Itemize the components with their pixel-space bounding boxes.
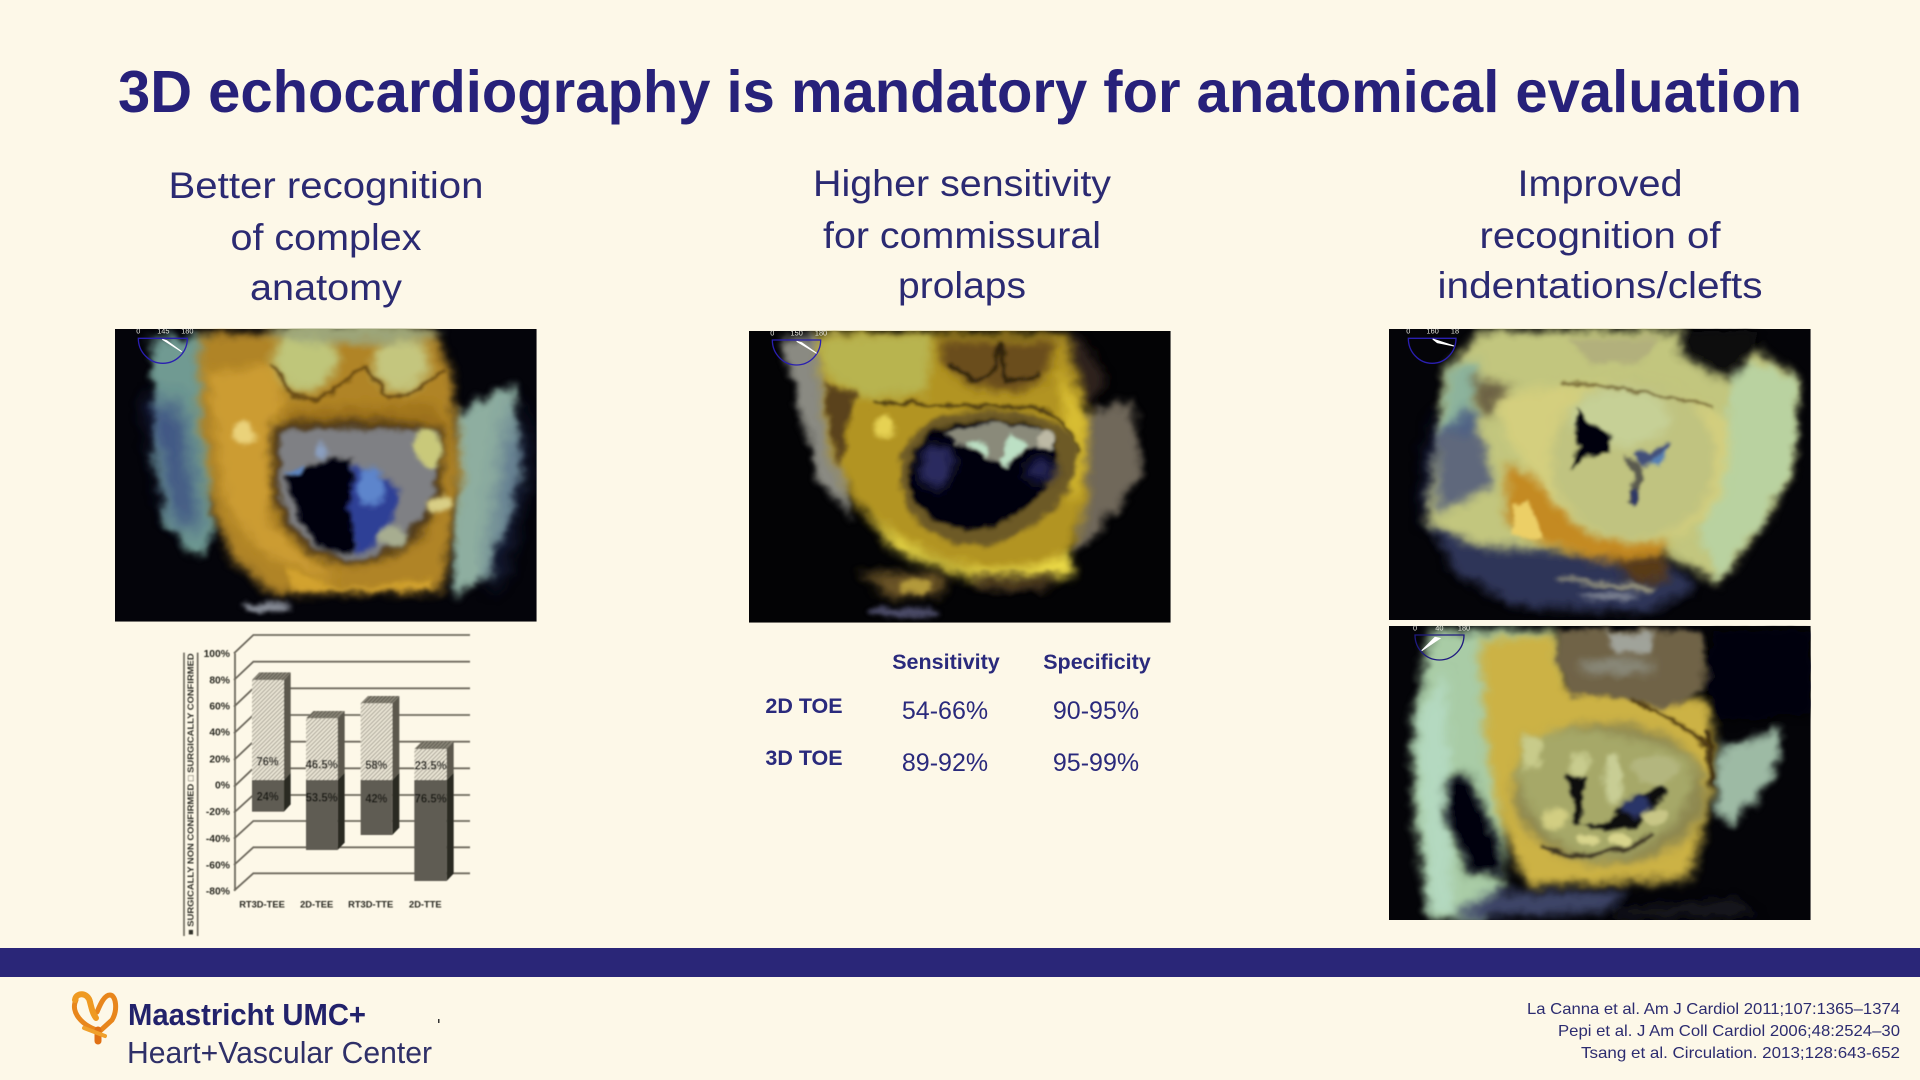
x axis labels	[239, 900, 442, 910]
angle indicator: 0	[136, 327, 140, 336]
heading: indentations and clefts: indentations/clefts	[1438, 265, 1762, 306]
row: 2D TOE: 54-66%	[902, 697, 988, 725]
y axis labels: -80%	[206, 887, 230, 898]
heading: commissural prolaps: for commissural	[823, 215, 1101, 256]
legend	[184, 653, 198, 936]
x axis labels: 2D-TEE	[300, 900, 333, 910]
table header	[892, 650, 1151, 674]
angle indicator: 150	[791, 329, 803, 338]
angle indicator: 18	[1451, 327, 1459, 336]
heading: commissural prolaps	[813, 163, 1112, 306]
heading: indentations and clefts: recognition of	[1480, 215, 1721, 256]
title: 3D echocardiography is mandatory for anatomical evaluation	[118, 59, 1802, 125]
x axis labels: RT3D-TEE	[239, 900, 285, 910]
references: Tsang et al. Circulation. 2013;128:643-652	[1581, 1045, 1900, 1062]
angle indicator: 0	[1406, 327, 1410, 336]
y axis labels: -60%	[206, 860, 230, 871]
x axis labels: RT3D-TTE	[348, 900, 393, 910]
department name: Heart+Vascular Center	[127, 1035, 432, 1070]
y axis labels: 80%	[209, 675, 230, 686]
heading: commissural prolaps: prolaps	[898, 265, 1026, 306]
bar value labels: 23.5%	[415, 759, 447, 772]
y axis labels: 100%	[204, 649, 230, 660]
table header: Sensitivity	[892, 650, 1000, 674]
bar value labels: 46.5%	[306, 758, 338, 771]
echo image: commissural prolaps	[749, 329, 1171, 623]
heading: complex anatomy	[168, 165, 484, 308]
grid lines	[234, 635, 470, 891]
footer band	[0, 948, 1920, 977]
angle indicator: 0	[1413, 623, 1417, 632]
echo image: clefts bottom	[1389, 623, 1811, 920]
logo: Maastricht UMC+	[74, 994, 432, 1070]
heading: complex anatomy: of complex	[230, 217, 422, 258]
bar: RT3D-TTE	[361, 696, 399, 835]
angle indicator: 180	[181, 327, 193, 336]
bar value labels: 42%	[365, 793, 388, 806]
legend: ■ SURGICALLY NON CONFIRMED □ SURGICALLY CONFIRMED	[185, 653, 195, 935]
table header: Specificity	[1043, 650, 1151, 674]
angle indicator	[770, 329, 827, 365]
row: 2D TOE	[765, 694, 1139, 725]
row: 3D TOE: 95-99%	[1053, 749, 1139, 777]
bar value labels: 24%	[257, 790, 279, 803]
references	[1527, 1001, 1900, 1062]
heading: complex anatomy: anatomy	[250, 267, 403, 308]
angle indicator	[1406, 327, 1459, 363]
heading: indentations and clefts	[1438, 163, 1762, 306]
bar: RT3D-TEE	[252, 672, 291, 812]
echo image: clefts top	[1389, 327, 1811, 620]
y axis labels: 40%	[209, 728, 230, 739]
row: 2D TOE: 90-95%	[1053, 697, 1139, 725]
x axis labels: 2D-TTE	[409, 900, 442, 910]
y axis labels: 60%	[209, 701, 230, 712]
heading: complex anatomy: Better recognition	[168, 165, 484, 206]
references: La Canna et al. Am J Cardiol 2011;107:1365–1374	[1527, 1001, 1900, 1018]
row: 3D TOE: 3D TOE	[765, 746, 843, 770]
row: 3D TOE	[765, 746, 1139, 777]
bar value labels: 58%	[365, 759, 388, 772]
icon: orange heart ribbon	[74, 994, 116, 1041]
angle indicator: 160	[1427, 327, 1439, 336]
angle indicator: 145	[157, 327, 169, 336]
stray mark near logo	[438, 1019, 440, 1023]
heading: commissural prolaps: Higher sensitivity	[813, 163, 1112, 204]
bar: 2D-TTE	[414, 742, 454, 881]
brand name: Maastricht UMC+	[128, 997, 366, 1032]
angle indicator	[1413, 623, 1470, 660]
table: sensitivity and specificity	[765, 650, 1151, 777]
references: Pepi et al. J Am Coll Cardiol 2006;48:2524–30	[1558, 1023, 1900, 1040]
y axis labels: 20%	[209, 754, 230, 765]
y axis labels: 0%	[215, 781, 230, 792]
bar value labels: 53.5%	[306, 792, 338, 805]
echo image: complex anatomy	[115, 323, 537, 622]
row: 2D TOE: 2D TOE	[765, 694, 843, 718]
y axis labels	[204, 649, 230, 898]
chart: surgically confirmed vs non confirmed	[184, 635, 470, 936]
angle indicator	[136, 327, 193, 363]
angle indicator: 180	[815, 329, 827, 338]
row: 3D TOE: 89-92%	[902, 749, 988, 777]
bar value labels: 76%	[257, 756, 279, 769]
angle indicator: 180	[1458, 623, 1470, 632]
bar value labels: 76.5%	[415, 792, 447, 805]
y axis labels: -40%	[206, 834, 230, 845]
angle indicator: 0	[770, 329, 774, 338]
bar value labels	[257, 756, 447, 806]
heading: indentations and clefts: Improved	[1518, 163, 1682, 204]
angle indicator: 40	[1435, 623, 1443, 632]
bar: 2D-TEE	[306, 711, 345, 850]
y axis labels: -20%	[206, 807, 230, 818]
